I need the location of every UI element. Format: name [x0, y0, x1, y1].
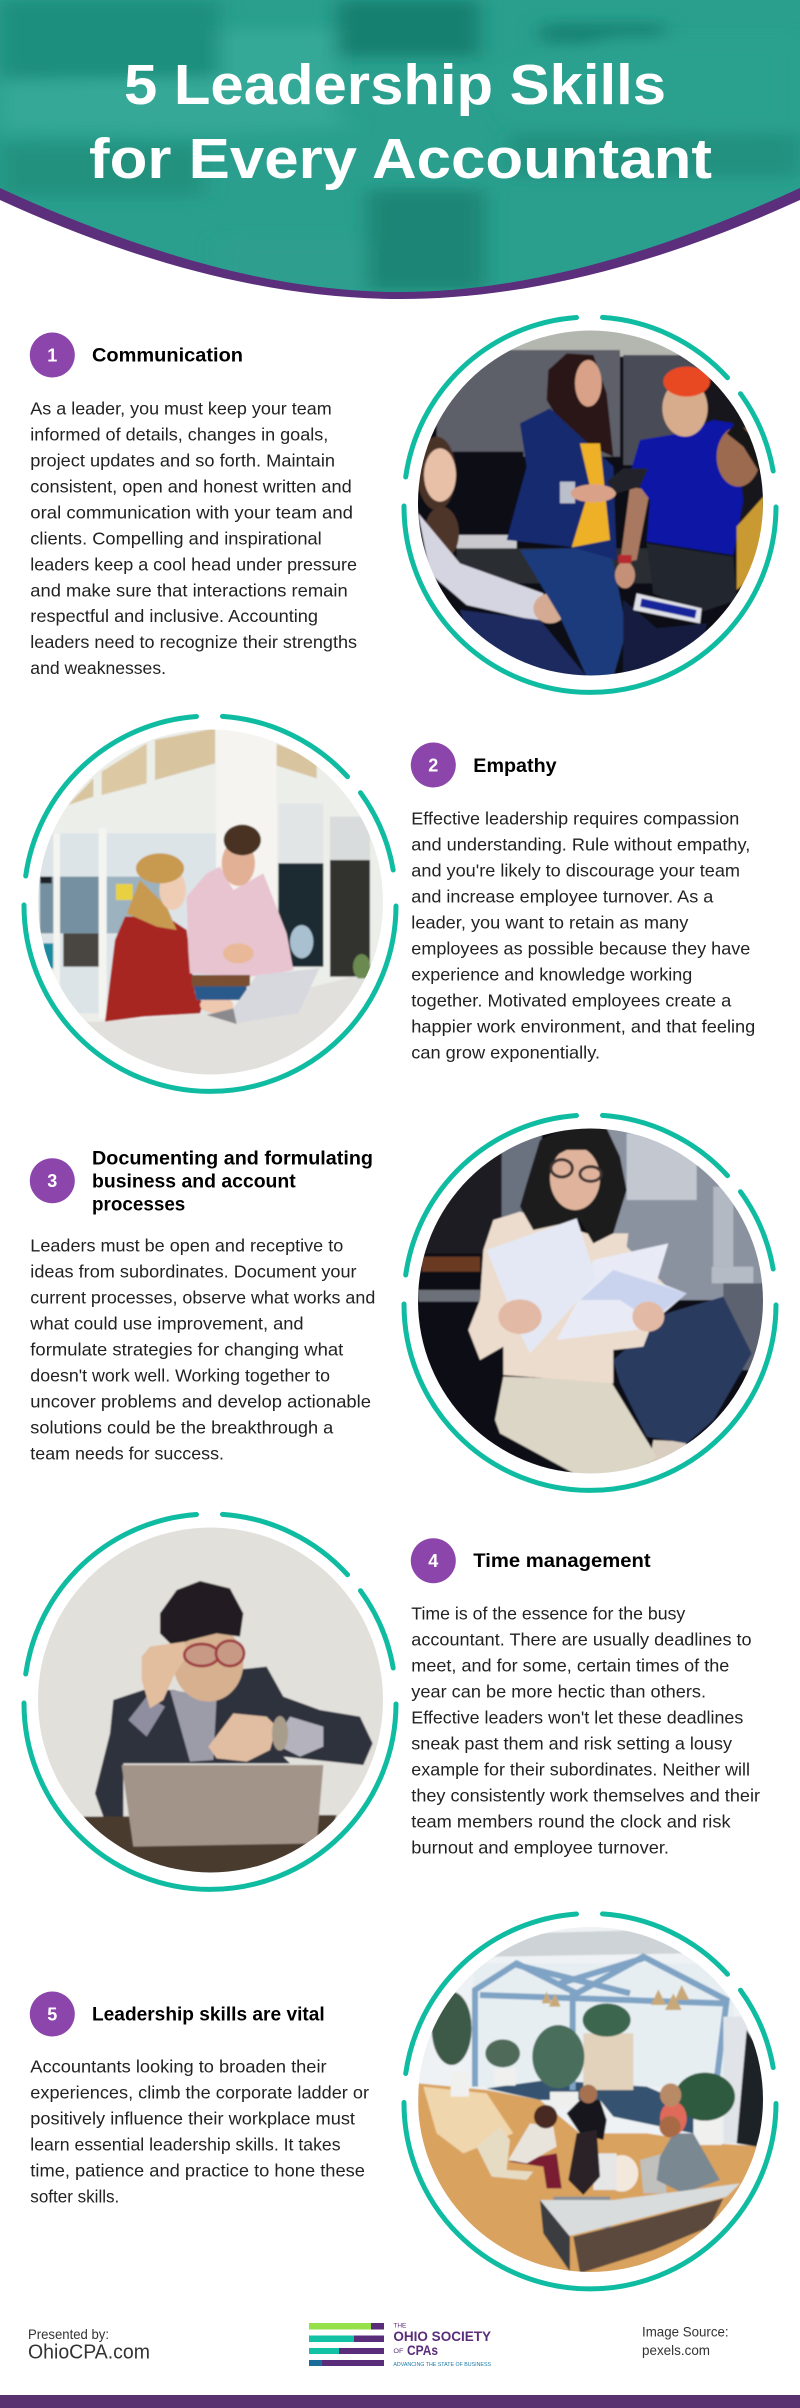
number badge 3: 3 [47, 1171, 57, 1191]
footer bar [0, 2395, 800, 2408]
title: for Every Accountant [89, 127, 712, 191]
ring frame 3 [404, 1115, 776, 1490]
logo wordmark: OF [393, 2349, 404, 2355]
body text: documenting [29, 1236, 375, 1464]
body text: communication: leaders need to recognize their strengths [30, 632, 357, 652]
photo: colleagues at laptop [33, 723, 387, 1077]
body text: time management: Time is of the essence for the busy [411, 1603, 686, 1623]
body text: leadership skills: learn essential leadership skills. It takes [30, 2135, 341, 2155]
body text: time management [411, 1603, 760, 1857]
body text: empathy: employees as possible because they have [411, 938, 750, 958]
photo: team talking around tablet [413, 327, 767, 680]
body text: documenting: Leaders must be open and receptive to [30, 1236, 343, 1256]
panel: documenting text [29, 1148, 375, 1464]
footer: presented by: OhioCPA.com [28, 2342, 150, 2364]
heading: documenting: Documenting and formulating [92, 1148, 373, 1169]
right woman [660, 2102, 687, 2135]
lap tablet [623, 600, 707, 677]
body text: documenting: team needs for success. [30, 1444, 224, 1464]
panel: empathy text [411, 742, 755, 1062]
logo wordmark: OHIO SOCIETY [393, 2328, 492, 2344]
plants [432, 1992, 472, 2065]
man centre [567, 2100, 607, 2140]
body text: leadership skills: softer skills. [30, 2187, 119, 2207]
body text: documenting: solutions could be the breakthrough a [30, 1418, 334, 1438]
panel: leadership skills text [30, 1992, 369, 2207]
footer: image source [642, 2324, 729, 2358]
body text: empathy: leader, you want to retain as many [411, 912, 689, 932]
ring frame 2 [24, 716, 396, 1091]
chair and woman left [477, 2127, 533, 2180]
body text: documenting: what could use improvement, and [29, 1314, 304, 1334]
center woman [547, 353, 613, 457]
body text: communication: and weaknesses. [30, 658, 166, 678]
laptop [122, 1765, 323, 1847]
right man [737, 497, 763, 590]
logo wordmark: THE [393, 2324, 406, 2330]
body text: empathy: together. Motivated employees create a [411, 990, 732, 1010]
woman [495, 1377, 657, 1477]
body text: empathy: and understanding. Rule without empathy, [411, 834, 750, 854]
body text: leadership skills: experiences, climb the corporate ladder or [30, 2083, 369, 2103]
logo: Ohio Society of CPAs [309, 2323, 492, 2368]
table [83, 1815, 337, 1877]
body text: communication: leaders keep a cool head under pressure [30, 554, 357, 574]
heading: empathy: Empathy [473, 756, 557, 777]
photo: man checking wristwatch [33, 1523, 387, 1877]
body text: time management: Effective leaders won't let these deadlines [411, 1707, 744, 1727]
body text: empathy [411, 808, 755, 1062]
woman [105, 917, 203, 1022]
body text: communication [30, 399, 357, 678]
heading: communication: Communication [92, 346, 243, 367]
body text: time management: burnout and employee turnover. [411, 1837, 669, 1857]
man back [640, 2153, 667, 2193]
body text: empathy: Effective leadership requires compassion [411, 808, 739, 828]
logo wordmark [393, 2324, 492, 2368]
ring frame 1 [404, 317, 776, 692]
body text: leadership skills: Accountants looking to broaden their [30, 2057, 327, 2077]
left woman [417, 437, 456, 510]
footer: image source: pexels.com [642, 2342, 710, 2358]
number badge 1: 1 [47, 346, 57, 366]
body text: time management: sneak past them and risk setting a lousy [411, 1733, 732, 1753]
body text: leadership skills: positively influence their workplace must [30, 2109, 355, 2129]
hands [498, 1299, 542, 1334]
number badge 2 [411, 742, 456, 788]
body text: empathy: experience and knowledge working [411, 964, 692, 984]
roof frames [475, 1957, 727, 2090]
footer: presented by [28, 2326, 150, 2364]
papers [557, 1243, 687, 1340]
footer: image source: Image Source: [642, 2324, 729, 2340]
tablet and hand [571, 484, 616, 502]
logo wordmark: ADVANCING THE STATE OF BUSINESS [393, 2362, 491, 2368]
number badge 5: 5 [47, 2004, 57, 2024]
lamps [542, 1992, 552, 2003]
ring frame 4 [24, 1514, 396, 1889]
body text: empathy: happier work environment, and that feeling [411, 1016, 755, 1036]
number badge 4 [411, 1538, 456, 1583]
body text: empathy: can grow exponentially. [411, 1042, 600, 1062]
sofa [648, 1438, 688, 1464]
body text: communication: informed of details, changes in goals, [30, 425, 328, 445]
laptop [233, 968, 319, 1023]
sofa [540, 2183, 740, 2237]
table [87, 976, 356, 1074]
body text: leadership skills: time, patience and practice to hone these [30, 2161, 365, 2181]
title: 5 Leadership Skills [124, 53, 666, 117]
body text: documenting: formulate strategies for changing what [30, 1340, 343, 1360]
panel: time management text [411, 1538, 760, 1857]
body text: empathy: and you're likely to discourage your team [411, 860, 740, 880]
heading: documenting [92, 1148, 373, 1215]
body text: time management: team members round the clock and risk [411, 1811, 731, 1831]
number badge 2: 2 [428, 756, 438, 776]
number badge 5 [30, 1992, 75, 2036]
body text: communication: consistent, open and honest written and [30, 476, 352, 496]
heading: documenting: business and account [92, 1171, 296, 1192]
heading: documenting: processes [92, 1194, 185, 1215]
body text: communication: and make sure that interactions remain [30, 580, 348, 600]
logo bars [309, 2323, 384, 2366]
body text: documenting: ideas from subordinates. Document your [30, 1262, 357, 1282]
body text: communication: respectful and inclusive. Accounting [30, 606, 318, 626]
body text: documenting: doesn't work well. Working together to [30, 1366, 330, 1386]
ring frame 5 [404, 1914, 776, 2289]
body text: communication: project updates and so forth. Maintain [30, 451, 335, 471]
body text: communication: clients. Compelling and inspirational [30, 528, 322, 548]
number badge 3 [30, 1158, 75, 1203]
heading: time management: Time management [473, 1551, 651, 1572]
table [615, 2154, 640, 2193]
header banner [0, 0, 800, 300]
body text: time management: year can be more hectic than others. [411, 1681, 706, 1701]
footer: presented by: Presented by: [28, 2326, 109, 2342]
body text: time management: meet, and for some, certain times of the [411, 1655, 729, 1675]
body text: leadership skills [30, 2057, 369, 2207]
body text: documenting: current processes, observe what works and [30, 1288, 375, 1308]
blue-shirt man [620, 487, 650, 563]
panel: communication text [30, 332, 357, 678]
body text: time management: example for their subordinates. Neither will [411, 1759, 750, 1779]
number badge 1 [30, 332, 75, 378]
photo: woman reading documents [413, 1123, 767, 1477]
body text: time management: accountant. There are usually deadlines to [411, 1629, 752, 1649]
woman back [593, 2153, 617, 2190]
body text: communication: As a leader, you must keep your team [30, 399, 332, 419]
heading: leadership skills: Leadership skills are vital [92, 2005, 325, 2026]
body text: documenting: uncover problems and develop actionable [30, 1392, 371, 1412]
number badge 4: 4 [428, 1551, 438, 1571]
photo: group meeting in bright office [413, 1920, 767, 2277]
title [89, 53, 712, 191]
man [193, 985, 247, 1000]
body text: communication: oral communication with your team and [30, 502, 353, 522]
logo wordmark: CPAs [407, 2342, 438, 2358]
body text: empathy: and increase employee turnover. As a [411, 886, 714, 906]
body text: time management: they consistently work themselves and their [411, 1785, 760, 1805]
